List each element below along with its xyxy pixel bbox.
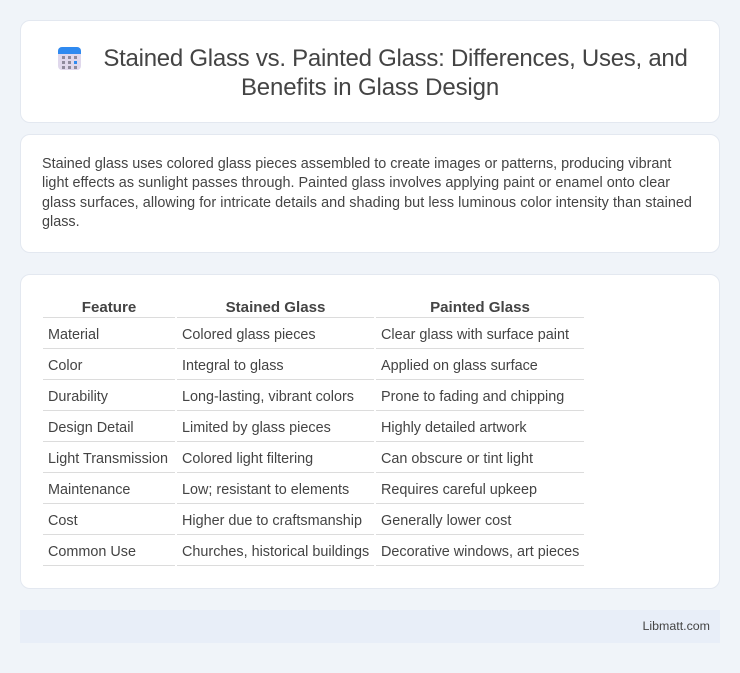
panel: comparison table: Applied on glass surface [381,358,538,374]
panel: comparison table: Colored glass pieces [182,327,316,343]
heading: title line 1: Stained Glass vs. Painted Glass: Differences, Uses, and [103,45,688,72]
panel: comparison table: Limited by glass pieces [182,420,331,436]
panel: comparison table: Design Detail [48,420,134,436]
panel: comparison table: Low; resistant to elements [182,482,349,498]
row: Color [48,358,538,374]
panel: introduction [20,134,720,253]
heading: title line 2: Benefits in Glass Design [241,74,499,101]
text: intro line 1: Stained glass uses colored glass pieces assembled to create images or patterns, producing vibrant [42,156,671,172]
row: Common Use [48,544,579,560]
text: intro line 4: glass. [42,214,80,230]
panel: comparison table: Common Use [48,544,136,560]
panel: comparison table: Decorative windows, art pieces [381,544,579,560]
panel: comparison table: Cost [48,513,78,529]
row: Maintenance [48,482,537,498]
table header: Painted Glass: Painted Glass [430,299,530,316]
panel: comparison table [20,274,720,589]
panel: comparison table: Color [48,358,82,374]
row: Light Transmission [48,451,533,467]
panel: comparison table: Light Transmission [48,451,168,467]
panel: comparison table: Durability [48,389,108,405]
panel: comparison table: Maintenance [48,482,130,498]
table header: Feature: Feature [82,299,136,316]
panel: comparison table: Colored light filtering [182,451,313,467]
panel: comparison table: Higher due to craftsmanship [182,513,362,529]
footer text: Libmatt.com: Libmatt.com [643,619,710,633]
panel: comparison table: Highly detailed artwork [381,420,527,436]
icon: calendar grid [58,47,81,70]
row: Material [48,327,569,343]
panel: comparison table: Can obscure or tint light [381,451,533,467]
text: intro line 2: light effects as sunlight passes through. Painted glass involves applying paint or enamel onto clear [42,175,670,191]
panel: comparison table: Integral to glass [182,358,284,374]
panel: comparison table: Long-lasting, vibrant colors [182,389,354,405]
footer bar [20,610,720,643]
panel: comparison table: Churches, historical buildings [182,544,369,560]
panel: comparison table: Generally lower cost [381,513,511,529]
panel: title card [20,20,720,123]
table header: Stained Glass: Stained Glass [226,299,325,316]
row: Design Detail [48,420,527,436]
row: Durability [48,389,564,405]
panel: comparison table: Prone to fading and chipping [381,389,564,405]
panel: comparison table: Clear glass with surface paint [381,327,569,343]
text: intro line 3: glass surfaces, allowing for intricate details and shading but less luminous color intensity than stained [42,194,692,210]
panel: comparison table: Material [48,327,99,343]
panel: comparison table: Requires careful upkeep [381,482,537,498]
row: Cost [48,513,512,529]
